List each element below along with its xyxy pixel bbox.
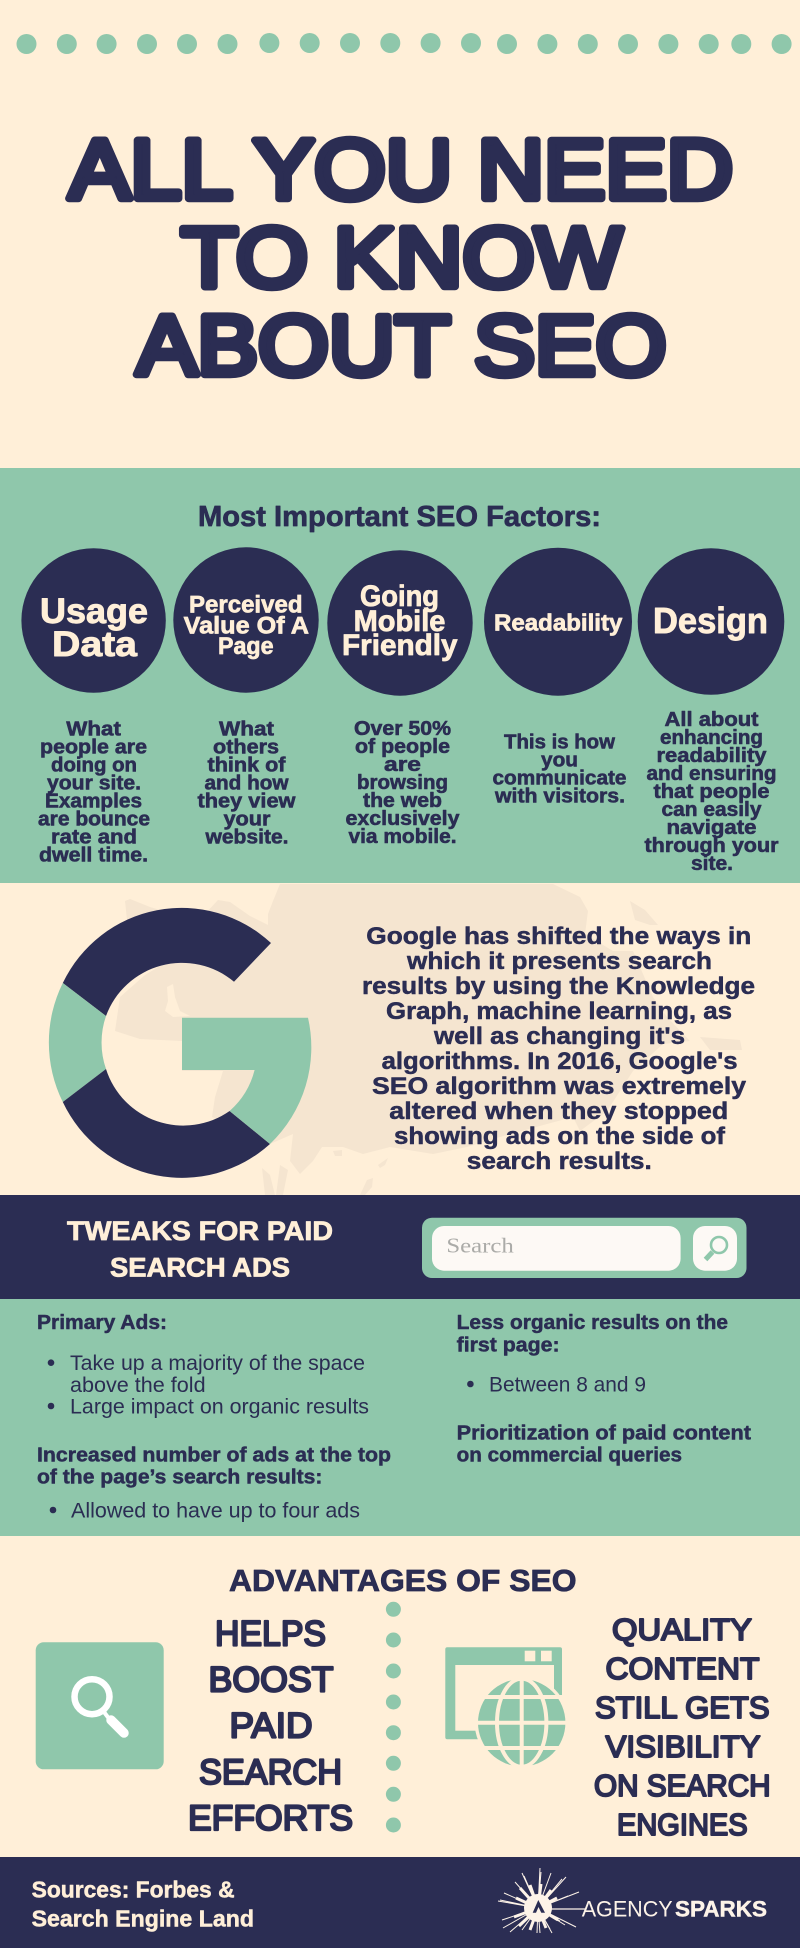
logo: agency sparks [498,1868,767,1933]
advantage: quality content still gets visibility: QUALITY [612,1612,752,1647]
logo: agency sparks: SPARKS [675,1897,767,1922]
sources: Sources: Forbes & [32,1876,235,1902]
factor: going mobile friendly: Over 50% [354,718,451,740]
google paragraph: well as changing it's [433,1023,685,1050]
faint world map background [115,884,742,1195]
factor: going mobile friendly: browsing [357,772,448,794]
panel: most important SEO factors [0,468,800,883]
google paragraph [362,923,755,1175]
factor: design: site. [691,853,733,875]
factor: usage data: What [66,719,121,741]
google paragraph: showing ads on the side of [394,1123,726,1150]
column: primary ads: Large impact on organic results [70,1396,369,1419]
factor: readability: Readability [494,610,622,636]
advantage: quality content still gets visibility: STILL GETS [595,1690,770,1725]
factor: usage data: people are [40,737,147,759]
icon: google G logo [49,908,311,1178]
title [69,122,733,392]
column: primary ads: above the fold [70,1374,206,1397]
google paragraph: results by using the Knowledge [362,973,755,1000]
factor: usage data: your site. [47,773,141,795]
factor: going mobile friendly: via mobile. [348,826,456,848]
google paragraph: altered when they stopped [389,1098,728,1125]
factor: design: navigate [666,817,756,839]
advantage: quality content still gets visibility: VISIBILITY [606,1729,760,1764]
column: primary ads: Allowed to have up to four ads [71,1500,360,1523]
google paragraph: which it presents search [406,948,712,975]
factor: readability: This is how [504,732,615,754]
factor: perceived value of a page: others [213,737,279,759]
factor: going mobile friendly: of people [355,736,450,758]
column: organic results [457,1311,751,1466]
advantage: helps boost paid search efforts: BOOST [208,1660,334,1700]
panel: tweaks header band [0,1195,800,1299]
column: primary ads: of the page’s search results: [37,1465,322,1488]
column: primary ads [37,1311,391,1523]
advantage: helps boost paid search efforts: EFFORTS [188,1799,353,1838]
advantage: helps boost paid search efforts: SEARCH [199,1753,342,1792]
factor: readability [484,548,632,808]
column: primary ads: Increased number of ads at the top [37,1443,391,1466]
sources: Search Engine Land [32,1906,254,1932]
factor: design: can easily [662,799,762,821]
factor: perceived value of a page: website. [204,827,288,849]
advantage: quality content still gets visibility: ENGINES [617,1807,748,1842]
column: organic results: Less organic results on the [457,1311,728,1334]
factor: usage data: Data [52,625,138,664]
panel: paid search details [0,1299,800,1536]
factor: going mobile friendly: Friendly [342,629,458,662]
factor: perceived value of a page [173,547,319,849]
factor: going mobile friendly: the web [363,790,442,812]
factor: going mobile friendly: exclusively [346,808,460,830]
title: ALL YOU NEED [69,122,733,216]
tweaks heading [67,1216,333,1283]
icon: magnifier tile [36,1642,164,1769]
column: primary ads: Primary Ads: [37,1311,167,1334]
google paragraph: Google has shifted the ways in [366,923,751,950]
search bar [422,1218,746,1278]
advantage: quality content still gets visibility [594,1612,771,1842]
logo: agency sparks: AGENCY [582,1897,673,1922]
factor: perceived value of a page: Page [218,633,274,660]
advantage: helps boost paid search efforts [188,1614,353,1838]
column: organic results: on commercial queries [457,1443,682,1466]
factor: design: and ensuring [646,763,776,785]
factor: usage data: Usage [40,592,148,631]
factor: readability: communicate [492,768,626,790]
factor: going mobile friendly [327,550,473,848]
factor: usage data: doing on [51,755,137,777]
tweaks heading: SEARCH ADS [110,1253,290,1283]
factor: perceived value of a page: Perceived [189,592,302,619]
factor: design [638,548,784,875]
search bar: Search [446,1234,514,1258]
advantages heading: ADVANTAGES OF SEO [229,1563,576,1598]
factor: going mobile friendly: are [384,754,421,776]
factor: perceived value of a page: think of [208,755,286,777]
panel: advantages of SEO [36,1563,771,1842]
factor: design: that people [654,781,770,803]
factors heading: Most Important SEO Factors: [198,501,601,533]
column: organic results: first page: [457,1333,560,1356]
factor: going mobile friendly: Mobile [354,605,445,638]
column: organic results: Prioritization of paid content [457,1421,751,1444]
factor: readability: with visitors. [494,786,625,808]
factor: perceived value of a page: What [219,719,274,741]
icon: browser window with globe [445,1647,569,1770]
factor: perceived value of a page: Value Of A [184,613,309,640]
factor: design: enhancing [660,727,763,749]
icon: search magnifier [706,1237,727,1260]
column: organic results: Between 8 and 9 [489,1374,646,1397]
advantage: helps boost paid search efforts: HELPS [215,1614,326,1654]
factor: going mobile friendly: Going [360,580,439,613]
decorative dotted row [16,33,792,54]
panel: footer [0,1857,800,1948]
sources [32,1876,254,1932]
factor: design: All about [664,709,759,731]
factor: perceived value of a page: they view [198,791,296,813]
tweaks heading: TWEAKS FOR PAID [67,1216,333,1246]
title: ABOUT SEO [136,298,666,392]
factor: perceived value of a page: your [224,809,271,831]
advantage: quality content still gets visibility: ON SEARCH [594,1768,771,1803]
factor: readability: you [541,750,578,772]
google paragraph: algorithms. In 2016, Google's [382,1048,738,1075]
google paragraph: Graph, machine learning, as [386,998,732,1025]
factor: design: through your [644,835,779,857]
factor: usage data [21,548,166,867]
factor: usage data: are bounce [38,809,150,831]
vertical dotted divider [386,1602,401,1832]
factor: usage data: rate and [51,827,137,849]
advantage: helps boost paid search efforts: PAID [230,1706,312,1746]
factor: design: Design [653,600,768,641]
google paragraph: search results. [467,1148,652,1175]
advantage: quality content still gets visibility: CONTENT [606,1651,760,1686]
column: primary ads: Take up a majority of the space [70,1352,365,1375]
factor: usage data: dwell time. [39,845,148,867]
panel: google algorithm [49,884,755,1195]
factor: usage data: Examples [45,791,142,813]
google paragraph: SEO algorithm was extremely [372,1073,747,1100]
factor: design: readability [656,745,767,767]
factor: perceived value of a page: and how [204,773,289,795]
title: TO KNOW [181,210,622,304]
